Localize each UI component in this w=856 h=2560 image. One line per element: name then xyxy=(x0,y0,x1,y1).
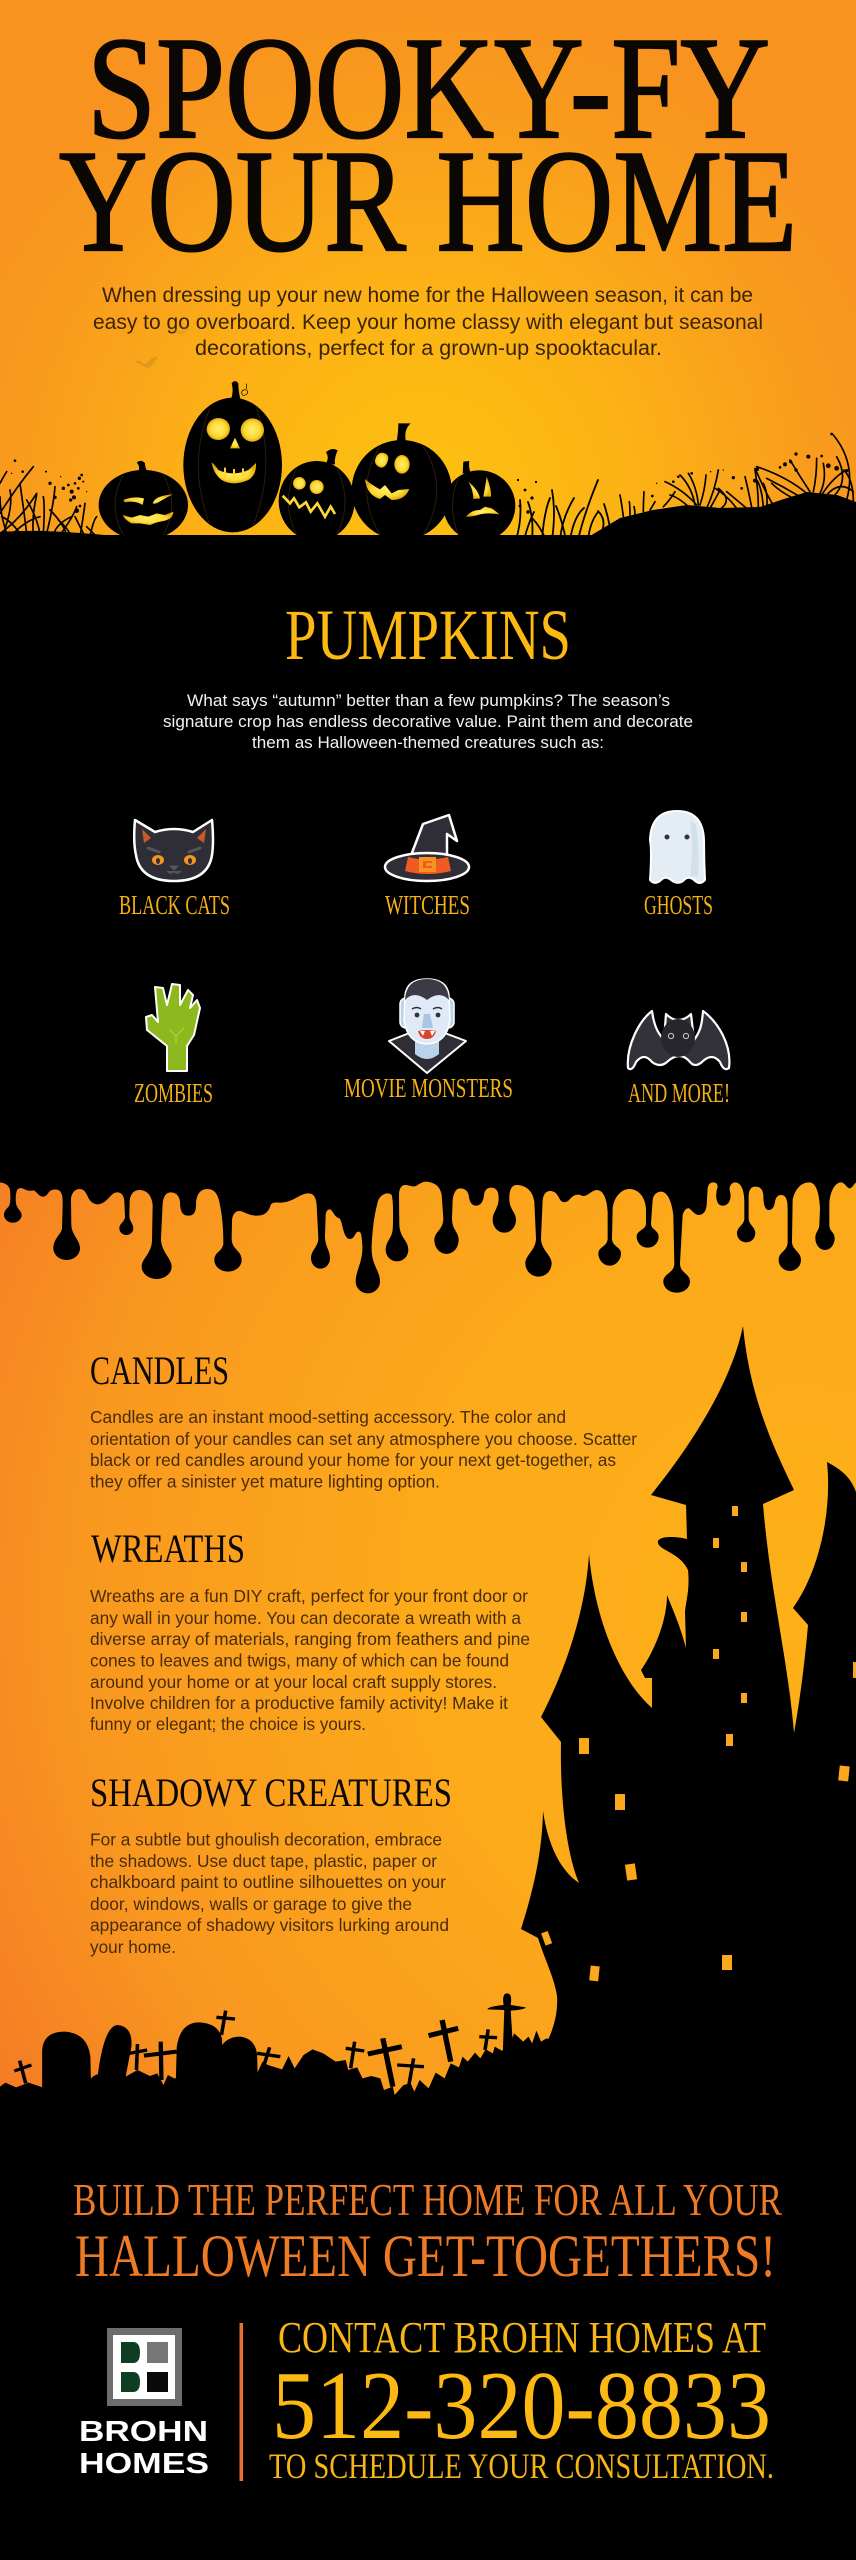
black pumpkins section background xyxy=(0,535,856,1175)
contact line: CONTACT BROHN HOMES AT xyxy=(278,2313,766,2362)
heading: wreaths: WREATHS xyxy=(91,1526,245,1571)
pumpkins intro text xyxy=(163,691,693,752)
shadowy creatures body: your home. xyxy=(90,1937,176,1957)
label: black cats: BLACK CATS xyxy=(119,890,230,920)
sky background xyxy=(0,0,856,560)
icon: faint bats xyxy=(134,327,190,368)
icon: ghost xyxy=(650,811,705,883)
label: ghosts: GHOSTS xyxy=(644,890,713,920)
wreaths body: around your home or at your local craft supply stores. xyxy=(90,1672,497,1692)
shadowy creatures body: door, windows, walls or garage to give the xyxy=(90,1894,412,1914)
pumpkins intro text: What says “autumn” better than a few pumpkins? The season’s xyxy=(187,691,670,710)
title xyxy=(59,7,797,282)
right grass xyxy=(620,433,853,517)
pumpkin 5 xyxy=(443,461,515,541)
crosses xyxy=(14,2011,497,2087)
section: shadowy creatures xyxy=(90,1770,452,1957)
intro text: easy to go overboard. Keep your home classy with elegant but seasonal xyxy=(93,311,763,334)
icon: dracula xyxy=(389,979,466,1073)
label: movie monsters: MOVIE MONSTERS xyxy=(344,1073,513,1103)
icon: witch hat xyxy=(385,815,469,881)
wreaths body: Wreaths are a fun DIY craft, perfect for your front door or xyxy=(90,1586,528,1606)
intro text xyxy=(93,284,763,360)
candles body: orientation of your candles can set any atmosphere you choose. Scatter xyxy=(90,1429,637,1449)
logo: Brohn Homes: HOMES xyxy=(79,2448,209,2480)
call to action headline xyxy=(73,2174,782,2289)
wreaths body: any wall in your home. You can decorate a wreath with a xyxy=(90,1608,521,1628)
tombstones xyxy=(42,2022,258,2087)
icon: bat xyxy=(628,1011,729,1069)
icon: black cat xyxy=(134,820,213,881)
shadowy creatures body: the shadows. Use duct tape, plastic, paper or xyxy=(90,1851,437,1871)
pumpkin 2 skull xyxy=(183,381,282,532)
left grass xyxy=(0,459,97,537)
wreaths body: Involve children for a productive family activity! Make it xyxy=(90,1693,508,1713)
intro text: decorations, perfect for a grown-up spooktacular. xyxy=(195,337,662,360)
tall cross xyxy=(487,1993,526,2052)
haunted castle silhouette xyxy=(520,1326,856,2110)
wreaths body: funny or elegant; the choice is yours. xyxy=(90,1714,366,1734)
icon: zombie hand xyxy=(146,984,200,1071)
candles body: they offer a sinister yet mature lighting option. xyxy=(90,1472,440,1492)
jack-o-lanterns xyxy=(99,381,515,541)
castle windows xyxy=(541,1506,856,1981)
candles body: Candles are an instant mood-setting accessory. The color and xyxy=(90,1407,566,1427)
logo: Brohn Homes: BROHN xyxy=(79,2416,208,2448)
lower orange background xyxy=(0,1170,856,2110)
logo: Brohn Homes xyxy=(79,2328,209,2480)
wreaths body: cones to leaves and twigs, many of which can be found xyxy=(90,1650,509,1670)
pumpkin 4 xyxy=(352,423,452,540)
heading: shadowy creatures: SHADOWY CREATURES xyxy=(90,1770,452,1815)
graveyard ground xyxy=(0,1990,607,2103)
grass silhouettes and ground xyxy=(0,433,856,560)
candles body xyxy=(90,1407,637,1492)
candles body: black or red candles around your home for your next get-together, as xyxy=(90,1450,616,1470)
wreaths body xyxy=(90,1586,530,1734)
shadowy creatures body xyxy=(90,1830,449,1957)
label: and more: AND MORE! xyxy=(628,1078,730,1108)
graveyard silhouette xyxy=(0,1990,607,2103)
footer black background xyxy=(0,2100,856,2560)
pumpkin 3 xyxy=(279,449,355,541)
label: witches: WITCHES xyxy=(385,890,470,920)
intro text: When dressing up your new home for the Halloween season, it can be xyxy=(102,284,753,307)
phone number: 512-320-8833 xyxy=(272,2352,771,2460)
ground xyxy=(0,492,856,560)
heading: pumpkins: PUMPKINS xyxy=(285,595,571,675)
middle grass xyxy=(516,479,610,540)
section: wreaths xyxy=(90,1526,530,1734)
section: candles xyxy=(90,1348,637,1492)
dripping black slime xyxy=(0,1155,856,1293)
pumpkin 1 xyxy=(99,461,188,540)
shadowy creatures body: For a subtle but ghoulish decoration, embrace xyxy=(90,1830,442,1850)
shadowy creatures body: chalkboard paint to outline silhouettes on your xyxy=(90,1872,446,1892)
pumpkins intro text: them as Halloween-themed creatures such as: xyxy=(252,733,604,752)
shadowy creatures body: appearance of shadowy visitors lurking around xyxy=(90,1915,449,1935)
contact details xyxy=(269,2313,774,2486)
wreaths body: diverse array of materials, ranging from feathers and pine xyxy=(90,1629,530,1649)
label: zombies: ZOMBIES xyxy=(134,1078,213,1108)
pumpkins intro text: signature crop has endless decorative value. Paint them and decorate xyxy=(163,712,693,731)
contact divider xyxy=(240,2323,243,2481)
heading: candles: CANDLES xyxy=(90,1348,229,1393)
